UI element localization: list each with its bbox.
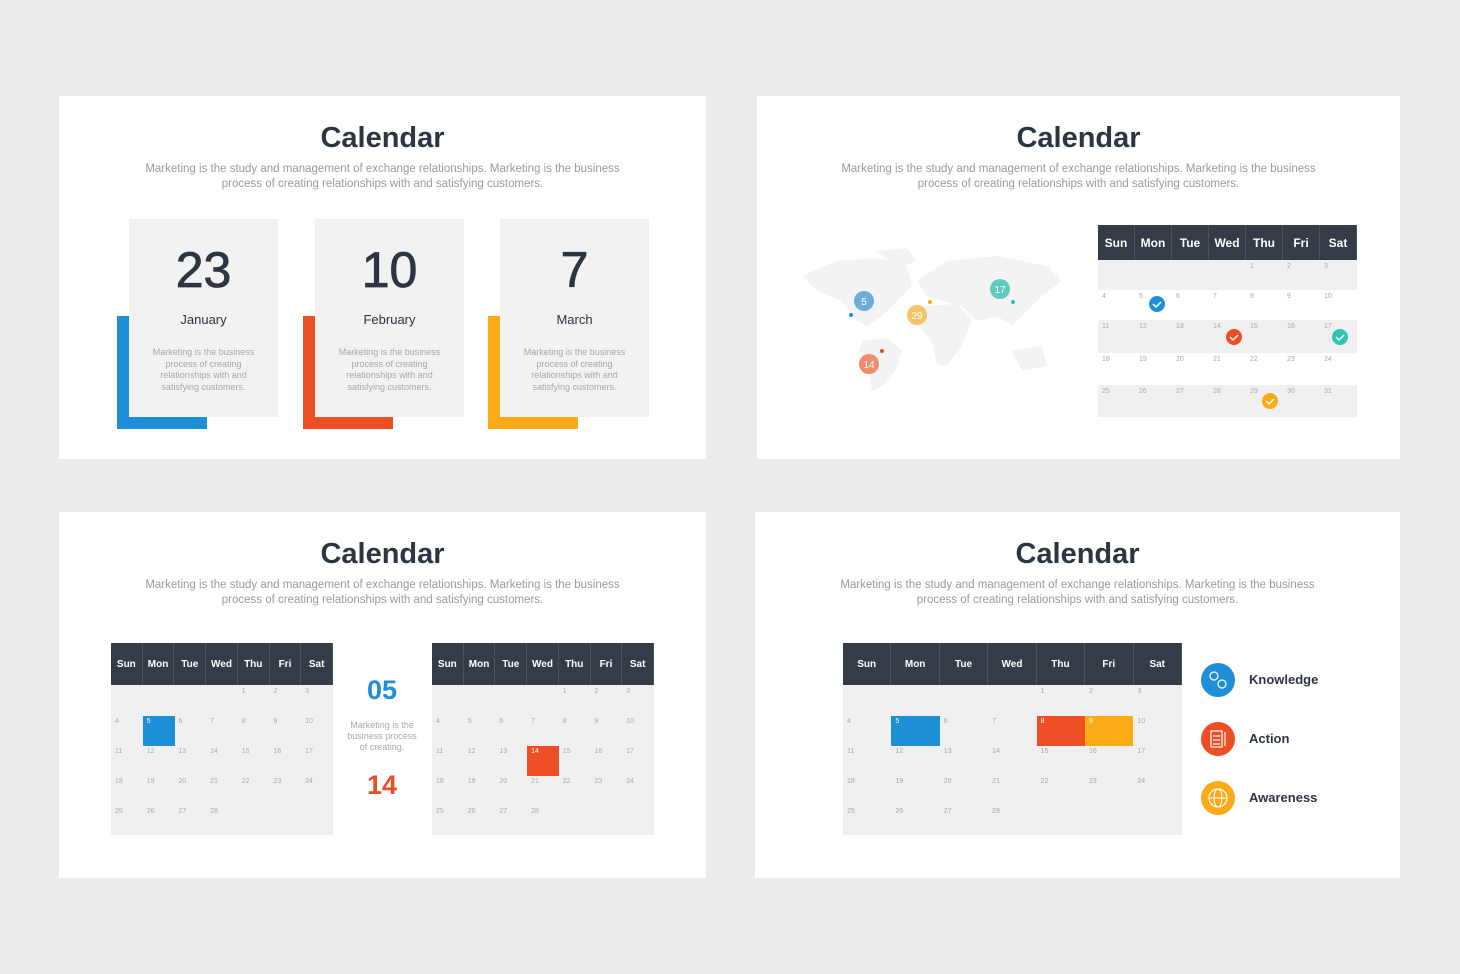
subtitle: Marketing is the study and management of exchange relationships. Marketing is the business xyxy=(145,163,620,175)
card: January xyxy=(117,219,278,429)
calendar: Thu xyxy=(1051,658,1070,670)
calendar: Mon xyxy=(1141,236,1165,250)
middle callout: of creating. xyxy=(360,742,404,752)
calendar: 13 xyxy=(1176,323,1184,330)
calendar left: 5 xyxy=(147,718,151,725)
panel: map calendar xyxy=(757,96,1400,459)
calendar: Wed xyxy=(1214,236,1240,250)
calendar right: 28 xyxy=(531,808,539,815)
world map xyxy=(802,248,1062,391)
calendar: 2 xyxy=(1089,688,1093,695)
calendar left: Wed xyxy=(211,658,232,670)
calendar left: 17 xyxy=(305,748,313,755)
calendar right: Sun xyxy=(438,658,457,670)
calendar: Sat xyxy=(1149,658,1165,670)
calendar left xyxy=(111,643,333,835)
calendar: 1 xyxy=(1250,263,1254,270)
calendar left: Thu xyxy=(244,658,262,670)
calendar: 20 xyxy=(1176,356,1184,363)
calendar: 9 xyxy=(1089,718,1093,725)
subtitle: Marketing is the study and management of exchange relationships. Marketing is the business xyxy=(145,579,620,591)
calendar left: Fri xyxy=(279,658,291,670)
calendar right: Sat xyxy=(630,658,645,670)
marker: 5: 5 xyxy=(861,297,867,308)
card: March: March xyxy=(556,312,593,327)
calendar: 28 xyxy=(1213,388,1221,395)
card: January: January xyxy=(180,312,227,327)
calendar: 31 xyxy=(1324,388,1332,395)
calendar left: Sun xyxy=(117,658,136,670)
card: March: Marketing is the business process of creating relationships with and satisfying customers. xyxy=(524,347,625,392)
calendar right xyxy=(432,643,654,835)
calendar: Tue xyxy=(955,658,972,670)
calendar: 10 xyxy=(1137,718,1145,725)
calendar: 6 xyxy=(1176,293,1180,300)
calendar: 2 xyxy=(1287,263,1291,270)
calendar right: 5 xyxy=(468,718,472,725)
calendar left: 3 xyxy=(305,688,309,695)
calendar right: 21 xyxy=(531,778,539,785)
calendar: 8 xyxy=(1250,293,1254,300)
middle callout: 14 xyxy=(367,770,397,800)
calendar: Thu xyxy=(1253,236,1275,250)
calendar left: 28 xyxy=(210,808,218,815)
calendar right: Fri xyxy=(600,658,612,670)
calendar right: 12 xyxy=(468,748,475,755)
calendar: 24 xyxy=(1137,778,1145,785)
card: February xyxy=(303,219,464,429)
calendar: 25 xyxy=(1102,388,1110,395)
calendar: 7 xyxy=(1213,293,1217,300)
calendar: 19 xyxy=(895,778,903,785)
calendar left: 21 xyxy=(210,778,218,785)
title: Calendar xyxy=(320,122,445,154)
calendar: 22 xyxy=(1250,356,1258,363)
legend item: Knowledge xyxy=(1201,663,1318,697)
calendar left: 27 xyxy=(178,808,186,815)
calendar right: 10 xyxy=(626,718,634,725)
calendar left: 4 xyxy=(115,718,119,725)
calendar right: 20 xyxy=(499,778,507,785)
calendar: 11 xyxy=(847,748,854,755)
subtitle: Marketing is the study and management of exchange relationships. Marketing is the business xyxy=(841,163,1316,175)
checks xyxy=(1149,296,1348,409)
middle callout: business process xyxy=(347,731,417,741)
calendar right: Tue xyxy=(502,658,519,670)
calendar: 4 xyxy=(847,718,851,725)
calendar: 9 xyxy=(1287,293,1291,300)
calendar: 27 xyxy=(944,808,952,815)
calendar right: 4 xyxy=(436,718,440,725)
card: March xyxy=(488,219,649,429)
calendar: Fri xyxy=(1293,236,1309,250)
subtitle: process of creating relationships with and satisfying customers. xyxy=(917,594,1238,606)
calendar: 19 xyxy=(1139,356,1147,363)
calendar left: 23 xyxy=(273,778,281,785)
calendar: 24 xyxy=(1324,356,1332,363)
calendar: 7 xyxy=(992,718,996,725)
middle callout: 05 xyxy=(367,675,397,705)
calendar left: 11 xyxy=(115,748,122,755)
calendar: 22 xyxy=(1041,778,1048,785)
calendar left: 15 xyxy=(242,748,250,755)
subtitle: Marketing is the study and management of exchange relationships. Marketing is the business xyxy=(840,579,1315,591)
calendar left: 19 xyxy=(147,778,154,785)
calendar: 3 xyxy=(1137,688,1141,695)
card: March: 7 xyxy=(561,242,588,298)
subtitle xyxy=(841,163,1316,190)
calendar: 3 xyxy=(1324,263,1328,270)
title: Calendar xyxy=(1016,122,1141,154)
calendar left: 12 xyxy=(147,748,154,755)
calendar right: 9 xyxy=(594,718,598,725)
legend item: Awareness xyxy=(1201,781,1317,815)
calendar: 4 xyxy=(1102,293,1106,300)
calendar: 29 xyxy=(1250,388,1258,395)
calendar: Fri xyxy=(1102,658,1115,670)
legend item: Awareness: Awareness xyxy=(1249,790,1317,805)
calendar left: 18 xyxy=(115,778,123,785)
calendar: 12 xyxy=(1139,323,1147,330)
card: February: Marketing is the business process of creating relationships with and satisfying customers. xyxy=(339,347,440,392)
calendar left: 20 xyxy=(178,778,186,785)
calendar: 25 xyxy=(847,808,855,815)
calendar xyxy=(843,643,1182,835)
calendar: Mon xyxy=(905,658,925,670)
calendar: Wed xyxy=(1002,658,1022,670)
card: January: Marketing is the business process of creating relationships with and satisfying customers. xyxy=(153,347,254,392)
calendar: 13 xyxy=(944,748,952,755)
calendar: 16 xyxy=(1287,323,1295,330)
legend xyxy=(1201,663,1318,815)
calendar left: Mon xyxy=(148,658,168,670)
calendar right: 11 xyxy=(436,748,443,755)
calendar: Tue xyxy=(1180,236,1200,250)
subtitle xyxy=(840,579,1315,606)
calendar right: 17 xyxy=(626,748,634,755)
calendar: 15 xyxy=(1250,323,1258,330)
middle callout xyxy=(347,675,417,800)
calendar left: 25 xyxy=(115,808,123,815)
calendar: 26 xyxy=(895,808,903,815)
marker: 17 xyxy=(990,279,1015,304)
calendar right: 23 xyxy=(594,778,602,785)
card: January: 23 xyxy=(176,242,231,298)
calendar: Sat xyxy=(1329,236,1347,250)
calendar: 27 xyxy=(1176,388,1184,395)
calendar left: 14 xyxy=(210,748,218,755)
marker: 5 xyxy=(849,291,874,317)
panel: calendar with legend xyxy=(755,512,1400,878)
marker: 29 xyxy=(907,300,932,325)
calendar: 20 xyxy=(944,778,952,785)
subtitle: process of creating relationships with and satisfying customers. xyxy=(918,178,1239,190)
calendar right: 22 xyxy=(563,778,571,785)
calendar: 6 xyxy=(944,718,948,725)
calendar: Sun xyxy=(1105,236,1127,250)
calendar left: 8 xyxy=(242,718,246,725)
calendar: 21 xyxy=(992,778,1000,785)
calendar: 1 xyxy=(1041,688,1044,695)
calendar left: 1 xyxy=(242,688,246,695)
subtitle: process of creating relationships with and satisfying customers. xyxy=(222,594,543,606)
marker: 14: 14 xyxy=(863,360,875,371)
marker: 29: 29 xyxy=(911,311,923,322)
calendar left: 16 xyxy=(273,748,281,755)
calendar right: 7 xyxy=(531,718,535,725)
panel: two calendars xyxy=(59,512,706,878)
calendar xyxy=(1098,225,1357,417)
subtitle xyxy=(145,579,620,606)
calendar right: 26 xyxy=(468,808,475,815)
calendar: 5 xyxy=(1139,293,1143,300)
calendar: 17 xyxy=(1137,748,1145,755)
calendar: 23 xyxy=(1287,356,1295,363)
calendar right: 1 xyxy=(563,688,567,695)
calendar: 14 xyxy=(992,748,1000,755)
legend item: Action: Action xyxy=(1249,731,1289,746)
calendar left: 6 xyxy=(178,718,182,725)
calendar right: 13 xyxy=(499,748,507,755)
calendar right: 24 xyxy=(626,778,634,785)
calendar: 23 xyxy=(1089,778,1097,785)
calendar: 12 xyxy=(895,748,903,755)
calendar left: Sat xyxy=(309,658,324,670)
calendar: 15 xyxy=(1041,748,1048,755)
title: Calendar xyxy=(320,538,445,570)
panel: date cards xyxy=(59,96,706,459)
calendar: 14 xyxy=(1213,323,1221,330)
calendar right: 18 xyxy=(436,778,444,785)
calendar left: 9 xyxy=(273,718,277,725)
calendar: 21 xyxy=(1213,356,1221,363)
middle callout: Marketing is the xyxy=(350,720,414,730)
calendar: 17 xyxy=(1324,323,1332,330)
marker: 14 xyxy=(859,349,884,374)
calendar: 11 xyxy=(1102,323,1109,330)
calendar: 26 xyxy=(1139,388,1147,395)
calendar right: 15 xyxy=(563,748,571,755)
calendar: 10 xyxy=(1324,293,1332,300)
calendar right: 16 xyxy=(594,748,602,755)
calendar left: 10 xyxy=(305,718,313,725)
calendar right: 14 xyxy=(531,748,539,755)
marker: 17: 17 xyxy=(994,285,1006,296)
calendar: Sun xyxy=(857,658,876,670)
calendar left: 22 xyxy=(242,778,250,785)
calendar: 18 xyxy=(847,778,855,785)
legend item: Action xyxy=(1201,722,1289,756)
calendar right: 6 xyxy=(499,718,503,725)
calendar right: 2 xyxy=(594,688,598,695)
calendar right: 27 xyxy=(499,808,507,815)
calendar left: 26 xyxy=(147,808,154,815)
calendar left: 13 xyxy=(178,748,186,755)
calendar: 5 xyxy=(895,718,899,725)
title: Calendar xyxy=(1015,538,1140,570)
calendar: 28 xyxy=(992,808,1000,815)
calendar: 16 xyxy=(1089,748,1097,755)
calendar right: Mon xyxy=(469,658,489,670)
calendar right: Thu xyxy=(565,658,583,670)
calendar: 18 xyxy=(1102,356,1110,363)
subtitle: process of creating relationships with and satisfying customers. xyxy=(222,178,543,190)
card: February: February xyxy=(363,312,416,327)
card: February: 10 xyxy=(362,242,417,298)
calendar: 8 xyxy=(1041,718,1044,725)
calendar right: 25 xyxy=(436,808,444,815)
calendar left: 7 xyxy=(210,718,214,725)
calendar right: Wed xyxy=(532,658,553,670)
legend item: Knowledge: Knowledge xyxy=(1249,672,1318,687)
calendar: 30 xyxy=(1287,388,1295,395)
calendar left: 2 xyxy=(273,688,277,695)
calendar right: 19 xyxy=(468,778,475,785)
calendar right: 8 xyxy=(563,718,567,725)
calendar left: 24 xyxy=(305,778,313,785)
subtitle xyxy=(145,163,620,190)
calendar left: Tue xyxy=(181,658,198,670)
calendar right: 3 xyxy=(626,688,630,695)
